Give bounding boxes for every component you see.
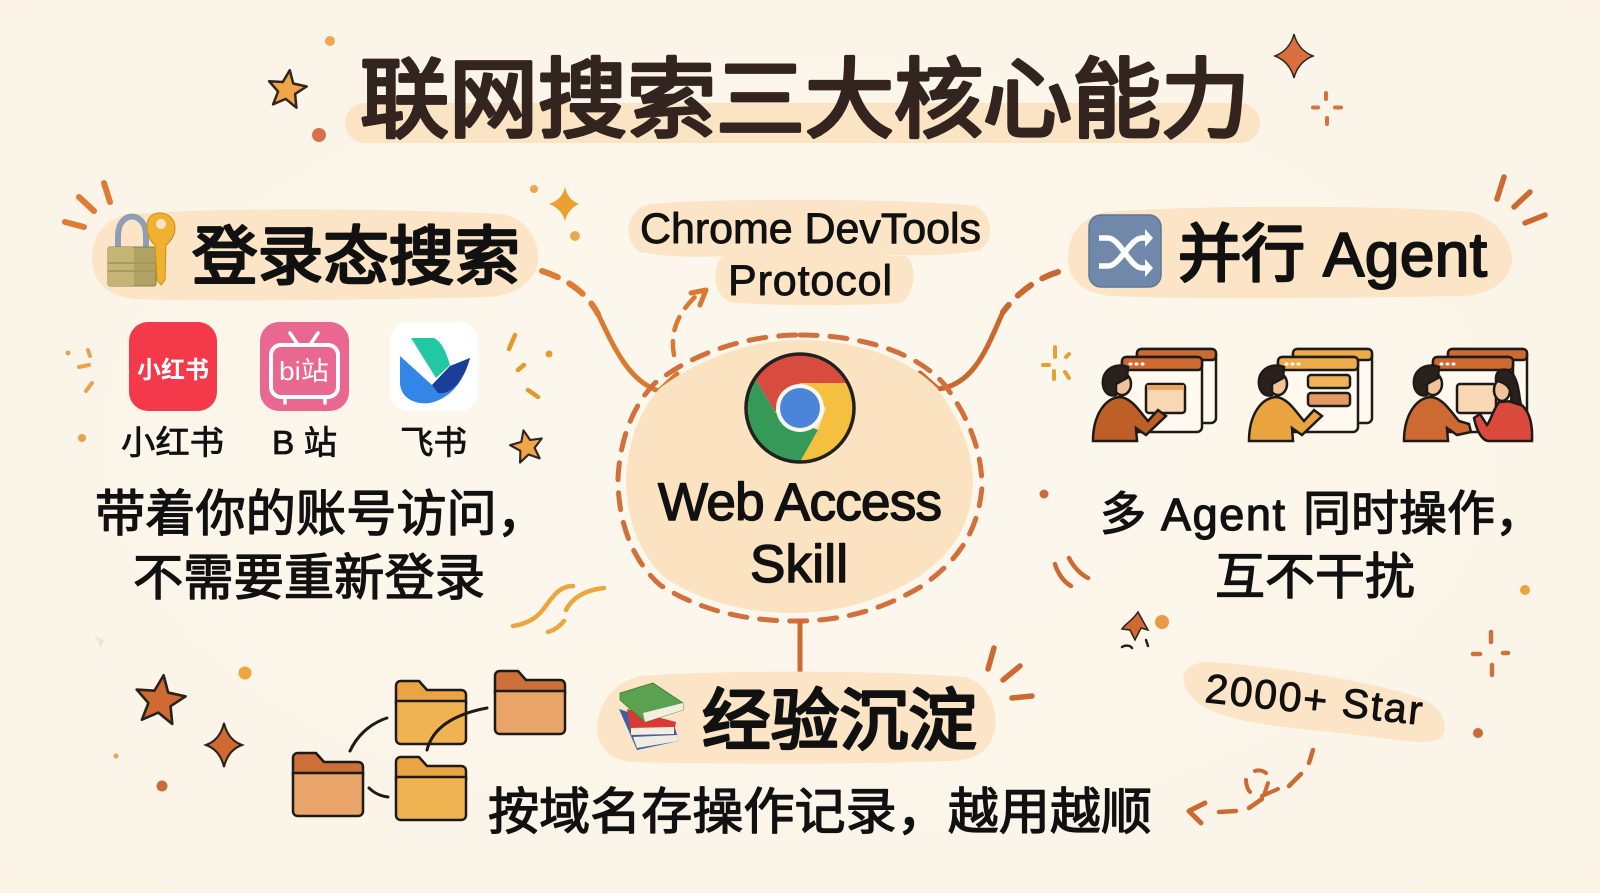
arrow: hub to protocol [673,290,706,355]
text block: agent description: 互不干扰 [1215,549,1415,605]
hub: web access skill: Skill [750,535,848,594]
decoration: left sparks [65,183,580,464]
connector: login to hub [542,271,677,391]
heading pill: experience [597,672,996,764]
decoration: title sparkles [266,34,1341,142]
panel: login search [92,209,547,606]
panel: experience [293,671,1152,840]
folder 1 [293,753,363,816]
folder 4 [495,671,565,734]
icon: feishu [390,322,478,411]
icon: bilibili: bi站 [279,356,329,386]
hub circle [626,340,973,613]
title highlight [345,103,1260,143]
icon: shuffle [1089,215,1161,287]
icon: lock and key [108,213,175,286]
decoration: right sparks [1040,177,1545,738]
text block: login description [95,486,547,606]
icon: bilibili [260,322,349,411]
badge: 2000+ star: 2000+ Star [1203,665,1425,734]
hub title: Web Access [658,473,942,532]
arrow: star to experience [1189,750,1313,823]
folder 2 [396,681,466,744]
label pill: chrome devtools protocol: Protocol [728,257,892,305]
hub: web access skill [618,335,982,621]
title: 联网搜索三大核心能力 [360,52,1250,149]
heading: parallel agent: 并行 [1178,220,1305,290]
text block: agent description: 同时操作， [1303,488,1543,541]
illustration: agent three [1404,349,1532,441]
heading: experience: 经验沉淀 [702,684,977,759]
connector: agent to hub [920,272,1058,389]
panel: parallel agent [1068,207,1543,605]
illustration: agent two [1249,349,1372,441]
text block: agent description: Agent [1161,489,1285,540]
text block: login description: 不需要重新登录 [133,550,485,606]
folder 3 [396,757,466,820]
icon: books [619,683,683,750]
label pill: chrome devtools protocol [629,200,990,305]
decoration: bottom sparks [95,586,1032,792]
heading pill: login search [92,209,538,300]
panel: parallel agent: Agent [1323,221,1487,290]
label: xiaohongshu: 小红书 [121,424,224,461]
text block: login description: 带着你的账号访问， [95,486,547,542]
icon: xiaohongshu: 小红书 [137,357,209,384]
illustration: agent one [1093,349,1216,441]
heading pill: parallel agent [1068,207,1512,298]
label pill: chrome devtools protocol: Chrome DevTools [640,205,981,253]
icon: chrome [746,354,854,462]
icon: folder tree [293,671,565,820]
connector: hub to experience [798,620,802,673]
label: feishu: 飞书 [400,424,467,461]
text block: experience description: 按域名存操作记录，越用越顺 [488,784,1152,840]
text block: agent description [1100,488,1543,605]
label: bilibili: B 站 [272,424,337,461]
icon: xiaohongshu [129,322,217,411]
heading: login search: 登录态搜索 [192,221,520,293]
text block: agent description: 多 [1100,488,1146,540]
